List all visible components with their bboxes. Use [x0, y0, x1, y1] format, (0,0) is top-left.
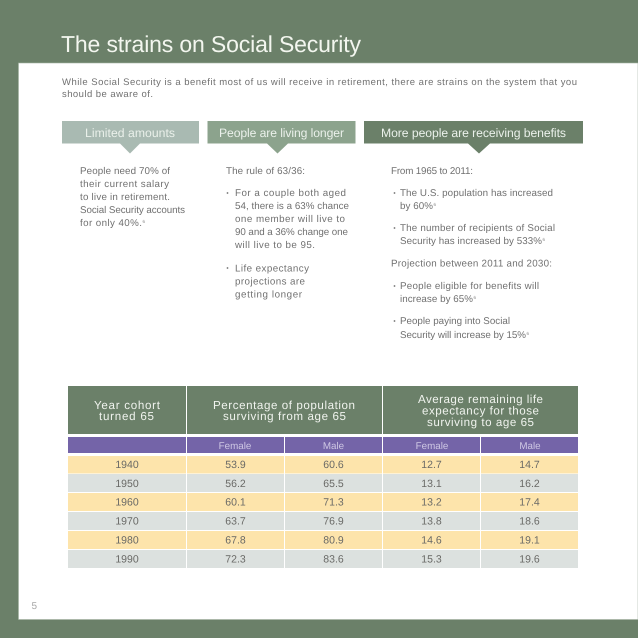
table row 1950: 16.2 — [519, 478, 540, 490]
table header row: surviving to age 65 — [427, 416, 534, 429]
table gender subheader row — [68, 437, 578, 453]
text column: People are living longer: will live to be 95. — [234, 240, 315, 251]
table row 1950: 56.2 — [225, 478, 246, 490]
text column: Limited amounts: 6 — [142, 219, 146, 224]
table header row: Percentage of population — [213, 399, 355, 412]
text column: More people are receiving benefits: The U.S. population has increased — [400, 188, 553, 199]
text column: More people are receiving benefits: Security has increased by 533% — [400, 236, 542, 247]
text column: More people are receiving benefits — [391, 166, 555, 341]
tab: Limited amounts — [62, 121, 199, 154]
table row 1940: 53.9 — [225, 459, 246, 471]
table row 1970: 76.9 — [323, 516, 344, 528]
table row 1950: 65.5 — [323, 478, 344, 490]
table row 1970: 1970 — [115, 516, 139, 528]
text column: More people are receiving benefits: 6 — [542, 237, 546, 242]
table row 1960: 71.3 — [323, 496, 344, 508]
table row 1960: 13.2 — [421, 496, 442, 508]
table row 1950 — [68, 474, 578, 492]
text column: Limited amounts: Social Security accounts — [80, 205, 185, 216]
table row 1970: 18.6 — [519, 516, 540, 528]
table row 1980: 80.9 — [323, 534, 344, 546]
text column: People are living longer: The rule of 63/36: — [226, 166, 305, 177]
table header row: turned 65 — [99, 410, 154, 423]
text column: People are living longer: one member will live to — [235, 214, 346, 225]
table header row: Year cohort — [94, 399, 161, 412]
table row 1950: 1950 — [115, 478, 139, 490]
text column: More people are receiving benefits: Security will increase by 15% — [400, 330, 526, 341]
text column: More people are receiving benefits: 6 — [526, 331, 530, 336]
text column: People are living longer: getting longer — [235, 290, 303, 300]
text column: More people are receiving benefits: increase by 65% — [400, 294, 473, 305]
table row 1980: 19.1 — [519, 534, 540, 546]
intro text: should be aware of. — [62, 89, 153, 100]
text column: People are living longer: 90 and a 36% change one — [235, 227, 349, 238]
text column: Limited amounts: People need 70% of — [80, 166, 170, 177]
text column: More people are receiving benefits: People eligible for benefits will — [400, 281, 539, 292]
table row 1990: 83.6 — [323, 554, 344, 566]
text column: More people are receiving benefits: From 1965 to 2011: — [391, 166, 473, 177]
table header row: Average remaining life — [418, 393, 543, 406]
text column: People are living longer: 54, there is a 63% chance — [235, 201, 350, 212]
table row 1990: 19.6 — [519, 554, 540, 566]
table row 1940: 60.6 — [323, 459, 344, 471]
tab: Limited amounts: Limited amounts — [85, 126, 175, 140]
table row 1970: 63.7 — [225, 516, 246, 528]
table header row: expectancy for those — [422, 404, 539, 418]
text column: Limited amounts: their current salary — [80, 179, 169, 190]
table row 1960 — [68, 493, 578, 511]
table row 1990: 1990 — [115, 554, 139, 566]
text column: People are living longer — [226, 166, 350, 300]
table row 1990: 15.3 — [421, 554, 442, 566]
table row 1940: 14.7 — [519, 459, 540, 471]
table row 1960: 1960 — [115, 496, 139, 508]
text column: More people are receiving benefits: Projection between 2011 and 2030: — [391, 258, 552, 270]
table row 1950: 13.1 — [421, 478, 442, 490]
data table — [68, 386, 578, 568]
text column: Limited amounts: to live in retirement. — [80, 192, 170, 203]
table row 1970: 13.8 — [421, 516, 442, 528]
text column: People are living longer: projections are — [235, 276, 306, 288]
table header row: surviving from age 65 — [223, 410, 346, 423]
text column: More people are receiving benefits: The number of recipients of Social — [400, 223, 555, 234]
table row 1980: 1980 — [115, 534, 139, 546]
page number: 5 — [32, 601, 38, 612]
table gender subheader row: Female — [219, 441, 252, 452]
intro text: While Social Security is a benefit most of us will receive in retirement, there are strains on the system that you — [62, 77, 577, 88]
table row 1990 — [68, 550, 578, 568]
table header row — [68, 386, 578, 434]
tab: More people are receiving benefits — [364, 121, 583, 154]
table row 1940: 1940 — [115, 459, 139, 471]
text column: People are living longer: Life expectancy — [235, 264, 309, 274]
table row 1980 — [68, 531, 578, 549]
table row 1980: 67.8 — [225, 534, 246, 546]
table row 1980: 14.6 — [421, 534, 442, 546]
tab: People are living longer — [208, 121, 356, 154]
title: The strains on Social Security — [61, 31, 362, 57]
table gender subheader row: Male — [323, 441, 345, 452]
table row 1940 — [68, 456, 578, 474]
table row 1960: 60.1 — [225, 496, 246, 508]
text column: Limited amounts — [80, 166, 185, 229]
table gender subheader row: Male — [519, 441, 541, 452]
tab: People are living longer: People are living longer — [219, 126, 344, 140]
table row 1990: 72.3 — [225, 554, 246, 566]
text column: More people are receiving benefits: by 60% — [400, 201, 433, 212]
text column: More people are receiving benefits: 6 — [434, 202, 436, 207]
table row 1970 — [68, 512, 578, 530]
table gender subheader row: Female — [416, 441, 449, 452]
intro text — [62, 77, 577, 100]
tab: More people are receiving benefits: More people are receiving benefits — [381, 126, 566, 140]
text column: More people are receiving benefits: 6 — [474, 295, 476, 300]
text column: Limited amounts: for only 40%. — [80, 218, 142, 229]
text column: People are living longer: For a couple both aged — [235, 188, 346, 199]
table row 1940: 12.7 — [421, 459, 442, 471]
text column: More people are receiving benefits: People paying into Social — [400, 316, 510, 327]
table row 1960: 17.4 — [519, 496, 540, 508]
